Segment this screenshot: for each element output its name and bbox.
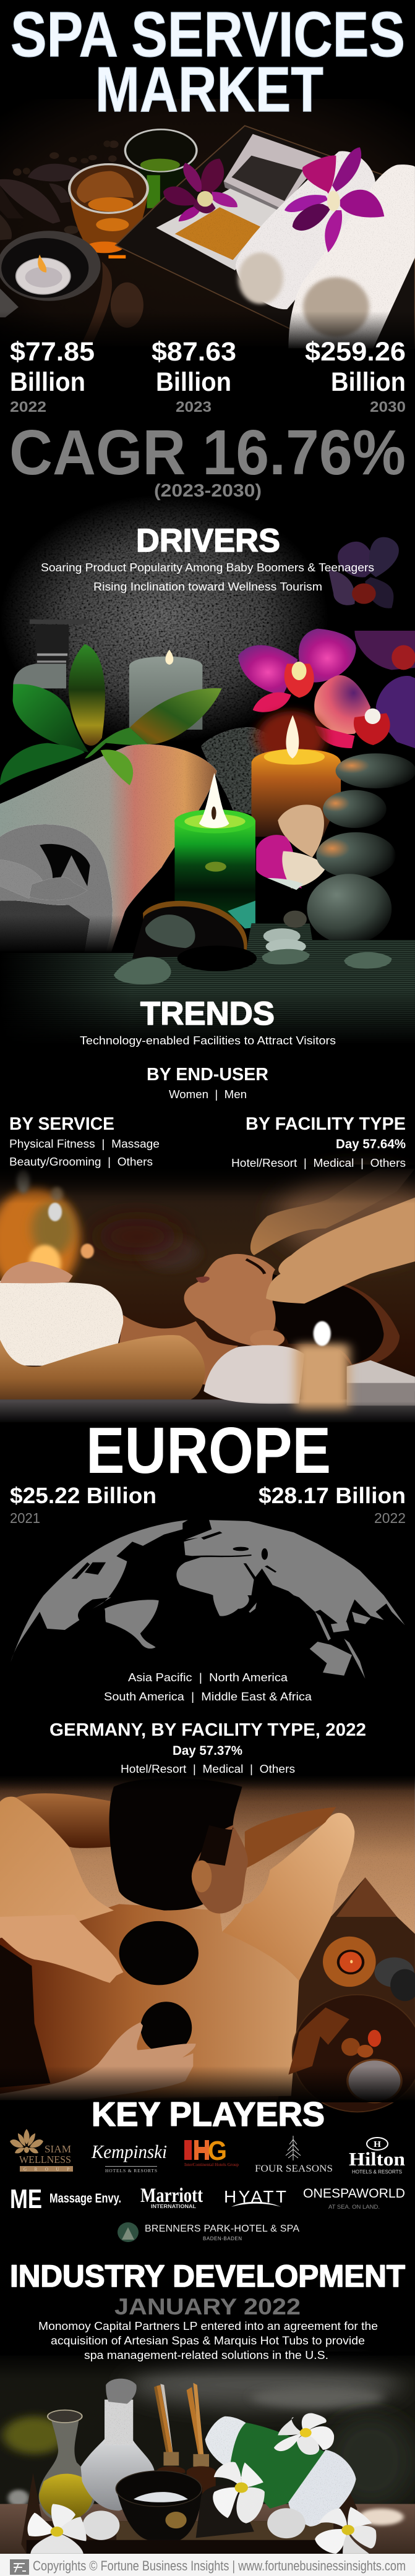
drivers heading: DRIVERS bbox=[136, 522, 280, 559]
trends heading: TRENDS bbox=[140, 996, 275, 1032]
segment: by end-user bbox=[147, 1065, 268, 1101]
germany by facility type: Hotel/Resort | Medical | Others bbox=[121, 1762, 295, 1775]
logo: massage envy bbox=[10, 2184, 121, 2214]
europe 2022 value bbox=[259, 1483, 406, 1526]
market size 2030: Billion bbox=[331, 367, 406, 397]
top leaf on towel bbox=[101, 749, 133, 785]
plumeria centre bbox=[213, 2462, 265, 2523]
carob pods and coffee beans bbox=[0, 140, 143, 348]
model right forearm bbox=[245, 1807, 336, 1869]
europe 2022 value: 2022 bbox=[374, 1510, 406, 1526]
icon: tree bbox=[286, 2136, 301, 2160]
other regions list: South America | Middle East & Africa bbox=[104, 1690, 312, 1703]
faded orchid top right bbox=[328, 537, 399, 608]
europe 2022 value: $28.17 Billion bbox=[259, 1483, 406, 1508]
CAGR: (2023-2030) bbox=[154, 481, 262, 501]
indonesia bbox=[315, 1612, 370, 1679]
logo: kempinski bbox=[91, 2141, 167, 2173]
segment: by service: Beauty/Grooming | Others bbox=[9, 1155, 153, 1168]
logo: onespaworld: ONESPAWORLD bbox=[303, 2186, 405, 2201]
photo: hot stone back massage bbox=[0, 1776, 415, 2112]
orchid blossom upper bbox=[238, 629, 356, 712]
title: MARKET bbox=[95, 54, 323, 125]
blurred bokeh backdrop bbox=[0, 2352, 415, 2510]
logo: four seasons bbox=[255, 2136, 333, 2174]
green leaves bbox=[0, 644, 222, 785]
logo: marriott: Marriott bbox=[140, 2185, 203, 2207]
market size 2030: $259.26 bbox=[305, 337, 406, 367]
gravel bbox=[201, 727, 276, 814]
plumeria upper bbox=[274, 2413, 334, 2455]
reed diffusers bbox=[154, 2383, 216, 2498]
glass jar bbox=[13, 620, 89, 688]
segment: by facility type: BY FACILITY TYPE bbox=[246, 1114, 406, 1134]
round plate with bundles bbox=[288, 1995, 415, 2112]
inland seas bbox=[72, 1532, 276, 1580]
amber glass bbox=[69, 164, 148, 258]
title bbox=[11, 0, 405, 125]
logo: brenners park-hotel and spa: BADEN-BADEN bbox=[203, 2236, 242, 2241]
europe 2021 value: $25.22 Billion bbox=[10, 1483, 156, 1508]
blurred candle bbox=[295, 1321, 349, 1412]
logo: kempinski: Kempinski bbox=[91, 2141, 167, 2162]
woman's arm bbox=[0, 1335, 205, 1414]
logo: marriott: INTERNATIONAL bbox=[151, 2203, 196, 2209]
logo: IHG: G bbox=[208, 2136, 227, 2166]
black bowl with salt bbox=[116, 2471, 202, 2540]
grey towel backdrop bbox=[7, 501, 320, 735]
green candle bbox=[174, 773, 255, 929]
towel and green leaf bbox=[205, 2416, 356, 2527]
drivers text: Rising Inclination toward Wellness Tourism bbox=[93, 580, 322, 593]
rolled towel bbox=[0, 744, 217, 952]
therapist hand bbox=[266, 1198, 415, 1303]
logo: four seasons: FOUR SEASONS bbox=[255, 2164, 333, 2174]
photo: towel, candles, orchids and stones bbox=[0, 487, 415, 1045]
market size 2030 bbox=[305, 337, 406, 416]
logo: hilton: H bbox=[374, 2140, 381, 2149]
massage table bbox=[0, 1399, 415, 1422]
massage stones bbox=[119, 1921, 199, 2054]
segment: by service: BY SERVICE bbox=[9, 1114, 114, 1134]
stacked stones bbox=[374, 1958, 415, 2001]
photo top fade bbox=[0, 1775, 415, 1791]
development text: Monomoy Capital Partners LP entered into an agreement for the bbox=[38, 2319, 378, 2332]
segment: by facility type bbox=[231, 1114, 406, 1169]
australia and islands bbox=[310, 1642, 352, 1676]
drivers text: Soaring Product Popularity Among Baby Boomers & Teenagers bbox=[41, 561, 374, 574]
wooden corner bbox=[336, 1877, 397, 1917]
mat fades bbox=[0, 989, 415, 1045]
wooden table bbox=[0, 2504, 415, 2554]
model left upper arm bbox=[0, 1797, 114, 1924]
trends text: Technology-enabled Facilities to Attract Visitors bbox=[80, 1034, 336, 1047]
development text bbox=[38, 2319, 378, 2361]
dark table backdrop bbox=[0, 99, 415, 346]
woman's face and neck bbox=[184, 1254, 285, 1347]
logo: siam wellness group: G R O U P bbox=[24, 2167, 69, 2172]
small orchid bbox=[163, 159, 237, 221]
logo: hyatt: HYATT bbox=[224, 2187, 286, 2206]
therapist arm bbox=[250, 1169, 415, 1255]
bowl of turmeric powder bbox=[156, 189, 278, 270]
hand on shoulder bbox=[0, 1261, 73, 1283]
fade to black bbox=[0, 1402, 415, 1424]
bowl of dark powder bbox=[224, 134, 323, 211]
region heading: EUROPE bbox=[86, 1414, 331, 1487]
candle holder bbox=[323, 1937, 376, 1987]
other regions list bbox=[104, 1671, 312, 1703]
model right upper arm bbox=[222, 1813, 354, 1981]
logo: hilton: HOTELS & RESORTS bbox=[352, 2169, 402, 2175]
dark right table bbox=[278, 1877, 415, 2100]
orchid blossom top right bbox=[354, 631, 415, 670]
towel bottom fade bbox=[0, 915, 143, 953]
segment: by facility type: Day 57.64% bbox=[336, 1137, 406, 1151]
logo: IHG: InterContinental Hotels Group bbox=[184, 2162, 239, 2167]
photo: spa tray with towels and orchids bbox=[0, 99, 415, 351]
market size 2022: Billion bbox=[10, 367, 85, 397]
europe 2021 value bbox=[10, 1483, 156, 1526]
germany by facility type: GERMANY, BY FACILITY TYPE, 2022 bbox=[49, 1720, 366, 1740]
tea light in dark dish bbox=[0, 231, 101, 317]
europe 2021 value: 2021 bbox=[10, 1510, 40, 1526]
madagascar bbox=[249, 1603, 257, 1613]
striped mat bbox=[0, 923, 415, 1043]
segment: by service: Physical Fitness | Massage bbox=[9, 1137, 160, 1150]
logo: hilton bbox=[349, 2138, 405, 2175]
logo: siam wellness group: WELLNESS bbox=[19, 2154, 71, 2165]
large orchid bbox=[285, 147, 384, 252]
herbal compress bbox=[81, 2379, 155, 2510]
torso bbox=[0, 1904, 299, 2100]
key players heading: KEY PLAYERS bbox=[92, 2095, 325, 2133]
rolled pillow bbox=[203, 1345, 415, 1405]
logo: massage envy: Massage Envy. bbox=[49, 2191, 121, 2206]
development text: spa management-related solutions in the U.S. bbox=[84, 2348, 328, 2361]
therapist hand lower bbox=[0, 2023, 196, 2100]
logo: siam wellness group bbox=[10, 2129, 73, 2172]
icon: fortune business insights logo bbox=[10, 2559, 29, 2575]
logo: siam wellness group: SIAM bbox=[45, 2143, 71, 2155]
sand towel background bbox=[0, 1776, 415, 2100]
stacked massage stones bbox=[307, 753, 415, 944]
development text: acquisition of Artesian Spas & Marquis Hot Tubs to provide bbox=[51, 2334, 365, 2347]
market size 2023: Billion bbox=[156, 367, 231, 397]
market size 2022: $77.85 bbox=[10, 337, 95, 367]
market size 2023 bbox=[152, 337, 236, 416]
pebbles bbox=[114, 911, 391, 984]
pale orchid bbox=[256, 804, 326, 890]
footer bar bbox=[0, 2554, 415, 2576]
top fade bbox=[0, 1164, 415, 1204]
date: JANUARY 2022 bbox=[114, 2294, 301, 2319]
black tray bbox=[116, 126, 415, 348]
orchid blossom right bbox=[314, 675, 415, 748]
grey candle bbox=[129, 650, 202, 730]
head and hair bbox=[109, 1778, 248, 1914]
logo: hilton: Hilton bbox=[349, 2148, 405, 2170]
orange candle bbox=[252, 711, 341, 837]
oil flask bbox=[39, 2410, 95, 2521]
segment: by service bbox=[9, 1114, 160, 1168]
world map globe bbox=[11, 1520, 405, 1679]
drivers text bbox=[41, 561, 374, 593]
logo: kempinski: HOTELS & RESORTS bbox=[105, 2168, 157, 2173]
rolled white towels bbox=[236, 151, 415, 348]
shadow left of body bbox=[0, 1945, 50, 2088]
south america bbox=[105, 1600, 159, 1648]
segment: by end-user: BY END-USER bbox=[147, 1065, 268, 1085]
woven tray bbox=[21, 2473, 357, 2554]
market size 2030: 2030 bbox=[370, 399, 406, 416]
fade to black bbox=[0, 311, 415, 351]
segment: by facility type: Hotel/Resort | Medical | Others bbox=[231, 1156, 406, 1169]
industry development heading: INDUSTRY DEVELOPMENT bbox=[10, 2259, 405, 2293]
woman's hair bbox=[272, 1274, 400, 1367]
logo: brenners park-hotel and spa bbox=[118, 2222, 299, 2242]
photo: woman receiving head massage bbox=[0, 1164, 415, 1424]
market size 2023: 2023 bbox=[176, 399, 212, 416]
therapist hand upper bbox=[0, 1915, 123, 1983]
north america and greenland bbox=[11, 1520, 188, 1662]
logo: brenners park-hotel and spa: BRENNERS PARK-HOTEL & SPA bbox=[145, 2224, 299, 2234]
brown blurred room bbox=[0, 1166, 415, 1423]
model left forearm bbox=[16, 1793, 114, 1848]
round candles bbox=[83, 2508, 306, 2540]
market size 2023: $87.63 bbox=[152, 337, 236, 367]
germany by facility type: Day 57.37% bbox=[173, 1744, 242, 1758]
segment: by end-user: Women | Men bbox=[169, 1088, 247, 1101]
dark glossy stone bbox=[132, 901, 257, 971]
icon: lotus bbox=[10, 2129, 43, 2154]
plumeria lower left bbox=[28, 2504, 87, 2554]
other regions list: Asia Pacific | North America bbox=[128, 1671, 288, 1684]
green glass bbox=[125, 129, 197, 208]
plumeria lower right bbox=[315, 2507, 376, 2554]
germany by facility type bbox=[49, 1720, 366, 1775]
eurasia and africa bbox=[176, 1520, 405, 1628]
logo: massage envy: ME bbox=[10, 2184, 42, 2214]
logo: IHG bbox=[184, 2136, 239, 2167]
logo: onespaworld: AT SEA. ON LAND. bbox=[328, 2204, 380, 2210]
photo: spa products with plumeria bbox=[0, 2352, 415, 2554]
logo: onespaworld bbox=[303, 2186, 405, 2210]
chest bbox=[116, 1315, 238, 1385]
white body towel bbox=[0, 1281, 123, 1367]
dark stones bbox=[196, 2485, 254, 2538]
market size 2022 bbox=[10, 337, 95, 416]
mat side fade bbox=[0, 951, 132, 1044]
blurred candles left bbox=[0, 1169, 94, 1294]
fade to black bbox=[0, 2066, 415, 2102]
market size 2022: 2022 bbox=[10, 399, 46, 416]
